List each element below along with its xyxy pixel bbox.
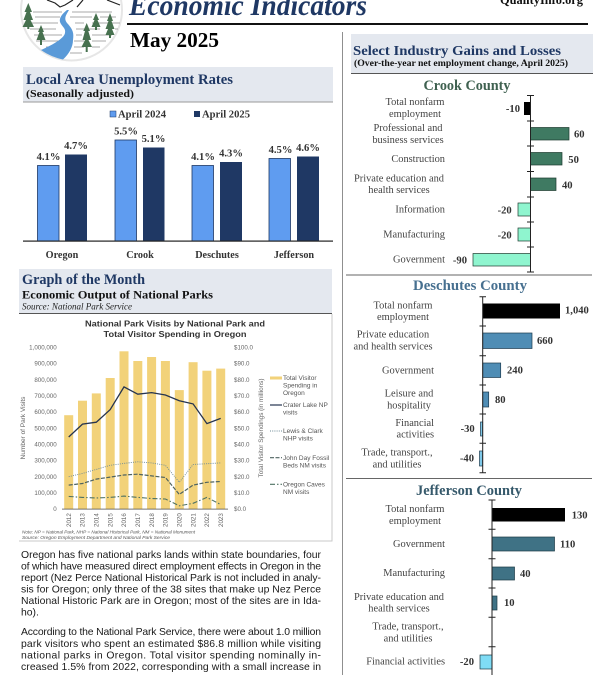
Crook County bar chart: 60	[574, 130, 585, 140]
Crook County bar chart: -20	[498, 230, 512, 242]
Deschutes County bar chart: and health services	[353, 341, 433, 352]
panel: Deschutes County	[353, 278, 589, 473]
Crook County bar chart: Government	[393, 254, 445, 266]
Deschutes County bar chart: -40	[460, 454, 474, 465]
panel: Jefferson County	[354, 483, 588, 675]
Deschutes County bar chart: Leisure and	[385, 389, 434, 400]
divider	[346, 274, 592, 276]
Crook County bar chart: 40	[562, 180, 573, 192]
right axis: $100.0	[234, 344, 253, 352]
unemployment heading: Local Area Unemployment Rates	[26, 72, 233, 88]
left axis: 1,000,000	[29, 344, 57, 352]
Deschutes County bar chart	[353, 296, 589, 473]
date: May 2025	[130, 28, 219, 52]
Deschutes County bar chart: employment	[377, 312, 429, 323]
Crook County bar chart: Construction	[391, 154, 446, 165]
spending bars	[64, 351, 225, 509]
line: Crater Lake	[69, 387, 221, 437]
left axis: 100,000	[34, 490, 57, 497]
header rule	[127, 23, 588, 25]
bar chart: unemployment: Crook	[126, 250, 154, 261]
chart legend: Total Visitor	[283, 375, 317, 382]
Jefferson County bar chart: 10	[504, 598, 515, 609]
industry heading: Select Industry Gains and Losses	[353, 44, 562, 59]
left axis: 400,000	[34, 442, 57, 448]
bar chart: unemployment: 4.6%	[296, 143, 320, 154]
Jefferson County bar chart: Trade, transport.,	[372, 622, 444, 633]
Deschutes County bar chart: 240	[507, 366, 523, 376]
left axis: 300,000	[34, 458, 57, 465]
chart title: Total Visitor Spending in Oregon	[104, 329, 246, 339]
chart legend: Spending in	[283, 382, 318, 390]
line: John Day Fossil Beds	[69, 474, 221, 494]
left axis: 700,000	[34, 393, 57, 400]
chart title	[85, 318, 265, 339]
Jefferson County bar chart: Private education and	[354, 592, 445, 603]
right axis: $50.0	[234, 425, 250, 432]
bar chart: unemployment: 4.1%	[191, 152, 215, 163]
bar chart: unemployment: 4.3%	[219, 148, 243, 160]
chart note	[22, 530, 196, 540]
article text: According to the National Park Service, there were about 1.0 million	[21, 627, 321, 638]
Deschutes County bar chart: Financial	[395, 418, 434, 429]
line: Oregon Caves	[69, 496, 221, 506]
chart legend: Lewis & Clark	[283, 428, 323, 435]
Jefferson County bar chart: health services	[368, 604, 430, 615]
line: Lewis and Clark	[69, 462, 221, 482]
Crook County bar chart: employment	[389, 109, 441, 120]
left axis: 600,000	[34, 409, 57, 416]
bar chart: unemployment	[23, 126, 333, 261]
Crook County bar chart	[354, 95, 585, 272]
graph heading: Graph of the Month	[22, 272, 145, 288]
Crook County bar chart: Total nonfarm	[386, 97, 444, 108]
article text: of which have measured direct employment effects in Oregon in the	[21, 562, 321, 572]
graph heading: Economic Output of National Parks	[22, 288, 213, 302]
Deschutes County bar chart: 660	[537, 336, 553, 347]
right axis	[234, 344, 265, 513]
chart legend: Beds NM visits	[283, 462, 327, 470]
panel: unemployment rates	[23, 67, 333, 261]
panel: Crook County	[354, 78, 585, 272]
Jefferson County title: Jefferson County	[416, 483, 523, 499]
Deschutes County bar chart: Total nonfarm	[374, 300, 432, 312]
chart note: Source: Oregon Employment Department and National Park Service	[22, 535, 171, 540]
panel: graph of the month	[19, 269, 332, 541]
chart title: National Park Visits by National Park and	[85, 318, 265, 328]
x axis: 2021	[190, 513, 197, 527]
Jefferson County bar chart: 130	[572, 510, 588, 521]
x axis: 2015	[107, 513, 114, 527]
right axis: $60.0	[234, 409, 250, 416]
Deschutes County bar chart: Private education	[357, 330, 430, 341]
x axis: 2020	[176, 513, 184, 527]
bar chart: unemployment: 4.5%	[269, 145, 292, 156]
article text	[21, 550, 322, 673]
left axis: 800,000	[34, 377, 57, 384]
Jefferson County bar chart: -20	[460, 657, 474, 668]
Deschutes County bar chart: Government	[382, 365, 434, 376]
Jefferson County bar chart: 40	[520, 569, 531, 580]
x axis: 2016	[121, 513, 128, 527]
x axis: 2023	[218, 513, 225, 527]
chart legend: Oregon Caves	[283, 482, 326, 488]
bar chart: unemployment: 4.7%	[64, 141, 88, 152]
industry heading	[351, 34, 593, 74]
Jefferson County bar chart: Government	[393, 539, 445, 550]
divider	[346, 478, 592, 479]
chart legend: Crater Lake NP	[283, 402, 328, 409]
right axis: $10.0	[234, 490, 250, 497]
left axis	[20, 344, 57, 513]
x axis: 2013	[80, 513, 87, 527]
legend: April 2025	[202, 110, 250, 120]
left axis: Number of Park Visits	[20, 396, 27, 459]
Crook County bar chart: business services	[372, 135, 444, 146]
right axis: $30.0	[234, 458, 250, 465]
bar chart: unemployment: Deschutes	[195, 250, 239, 261]
bar chart: unemployment: 5.1%	[142, 134, 165, 145]
x axis: 2012	[66, 513, 73, 527]
chart legend: John Day Fossil	[283, 455, 330, 462]
chart legend	[270, 375, 330, 496]
logo: river and forest emblem	[21, 0, 122, 60]
left axis: 0	[53, 506, 57, 513]
Crook County bar chart: Professional and	[374, 123, 443, 134]
Jefferson County bar chart: 110	[560, 540, 575, 551]
unemployment heading	[23, 67, 333, 102]
bar chart: unemployment: Jefferson	[274, 250, 314, 261]
left axis: 500,000	[34, 425, 57, 432]
article text: national parks in Oregon. Total visitor spending nominally in-	[21, 650, 321, 662]
Deschutes County bar chart: -30	[461, 424, 475, 435]
Crook County bar chart: -20	[498, 206, 512, 216]
Jefferson County bar chart: Manufacturing	[383, 568, 445, 579]
right axis: $40.0	[234, 442, 250, 448]
Crook County bar chart: -10	[506, 104, 520, 115]
Crook County title: Crook County	[424, 78, 511, 94]
Jefferson County bar chart: employment	[389, 516, 441, 527]
Deschutes County bar chart: activities	[396, 430, 434, 441]
left axis: 200,000	[34, 474, 57, 481]
Deschutes County bar chart: 80	[495, 395, 506, 406]
x axis: 2022	[204, 513, 211, 527]
chart frame	[19, 314, 332, 541]
right axis: $90.0	[234, 361, 250, 368]
bar chart: unemployment: 5.5%	[114, 126, 138, 138]
chart note: Note: NP = National Park, NHP = National Historical Park, NM = National Monument	[22, 530, 196, 535]
Deschutes County bar chart: Trade, transport.,	[361, 448, 433, 459]
chart legend: Oregon	[283, 390, 305, 397]
chart legend: NM visits	[283, 489, 310, 496]
column divider	[342, 32, 343, 675]
Deschutes County bar chart: hospitality	[387, 400, 432, 411]
bar chart: unemployment: Oregon	[46, 250, 79, 261]
article text: park visitors who spent an estimated $86.8 million while visiting	[21, 639, 321, 650]
article text: National Historic Park are in Oregon; most of the sites are in Ida-	[21, 596, 321, 607]
right axis: $20.0	[234, 474, 250, 481]
Crook County bar chart: -90	[453, 256, 467, 266]
x axis: 2019	[163, 513, 170, 527]
chart legend: NHP visits	[283, 436, 314, 443]
Crook County bar chart: Information	[395, 204, 446, 216]
chart: park visits and spending	[20, 318, 330, 540]
graph heading	[19, 269, 332, 314]
legend: April 2024	[118, 110, 166, 120]
x axis: 2014	[94, 513, 100, 527]
Deschutes County title: Deschutes County	[413, 278, 528, 294]
Deschutes County bar chart: and utilities	[373, 459, 421, 470]
chart legend: visits	[283, 410, 298, 416]
Jefferson County bar chart: and utilities	[384, 634, 432, 645]
Jefferson County bar chart: Total nonfarm	[386, 504, 444, 515]
Crook County bar chart: 50	[568, 155, 579, 166]
Crook County bar chart: health services	[368, 185, 430, 196]
legend	[110, 110, 250, 120]
right axis: Total Visitor Spendings (in millions)	[258, 379, 265, 477]
right axis: $70.0	[234, 393, 250, 400]
bar chart: unemployment: 4.1%	[37, 152, 60, 163]
x axis: 2017	[135, 513, 142, 527]
Deschutes County bar chart: 1,040	[565, 306, 589, 316]
left axis: 900,000	[34, 361, 57, 368]
article text: creased 1.5% from 2022, corresponding with a small increase in	[21, 662, 321, 673]
industry heading: (Over-the-year net employment change, April 2025)	[354, 58, 568, 68]
article text: Oregon has five national parks lands within state boundaries, four	[21, 550, 322, 561]
Crook County bar chart: Manufacturing	[383, 230, 445, 240]
Crook County bar chart: Private education and	[354, 174, 445, 184]
article text: report (Nez Perce National Historical Park is not included in analy-	[21, 573, 321, 584]
Jefferson County bar chart	[354, 500, 588, 675]
article text: ho).	[21, 608, 39, 618]
x axis	[62, 509, 228, 527]
Jefferson County bar chart: Financial activities	[366, 657, 445, 668]
unemployment heading: (Seasonally adjusted)	[26, 89, 135, 100]
article text: sis for Oregon; only three of the 38 sites that make up Nez Perce	[21, 584, 321, 596]
right axis: $0.0	[234, 506, 247, 513]
right axis: $80.0	[234, 377, 250, 384]
graph heading: Source: National Park Service	[22, 302, 132, 312]
x axis: 2018	[149, 513, 156, 527]
